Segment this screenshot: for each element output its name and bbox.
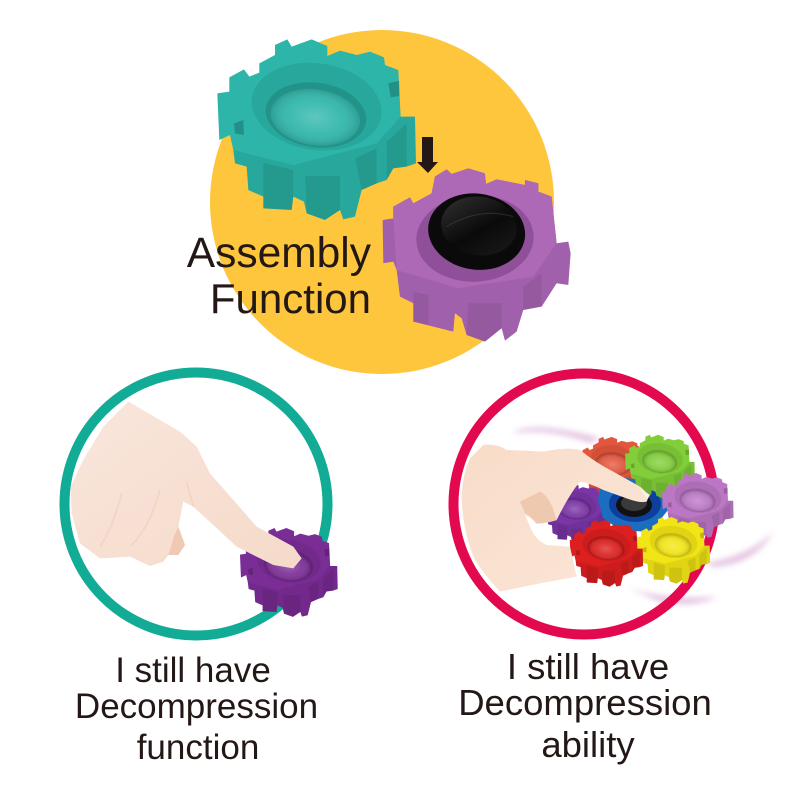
gear: red [570,520,643,587]
caption: left [75,651,318,767]
gear: yellow [637,517,710,584]
panel: press decompression [64,372,338,636]
caption: left: function [137,728,259,767]
gear: lilac [662,473,734,538]
illustration: gripping hand [462,445,650,592]
icon: purple gear with black button [383,168,571,342]
illustration: pointing hand [71,402,302,568]
gear: violet [542,483,608,543]
gear: blue with black button [598,477,672,532]
icon: purple gear pressed [240,528,338,617]
caption: right: I still have [507,646,669,687]
caption: right: ability [541,724,635,765]
heading: Assembly Function [187,230,372,322]
heading: Assembly Function: Function [210,275,371,322]
heading: Assembly Function: Assembly [187,230,372,277]
ring: teal [64,372,328,636]
arrow: assemble downward [417,137,438,173]
ring: crimson [454,374,714,634]
icon: gear cluster [542,435,734,587]
caption: right: Decompression [458,682,712,723]
caption: right [458,646,712,765]
caption: left: I still have [115,651,271,690]
gear: green [625,435,695,498]
panel: spin decompression [454,374,773,634]
icon: teal gear [217,39,416,220]
background circle: yellow [210,30,554,374]
gear: orange [578,437,649,501]
motion blur swooshes [512,428,773,604]
caption: left: Decompression [75,687,318,726]
